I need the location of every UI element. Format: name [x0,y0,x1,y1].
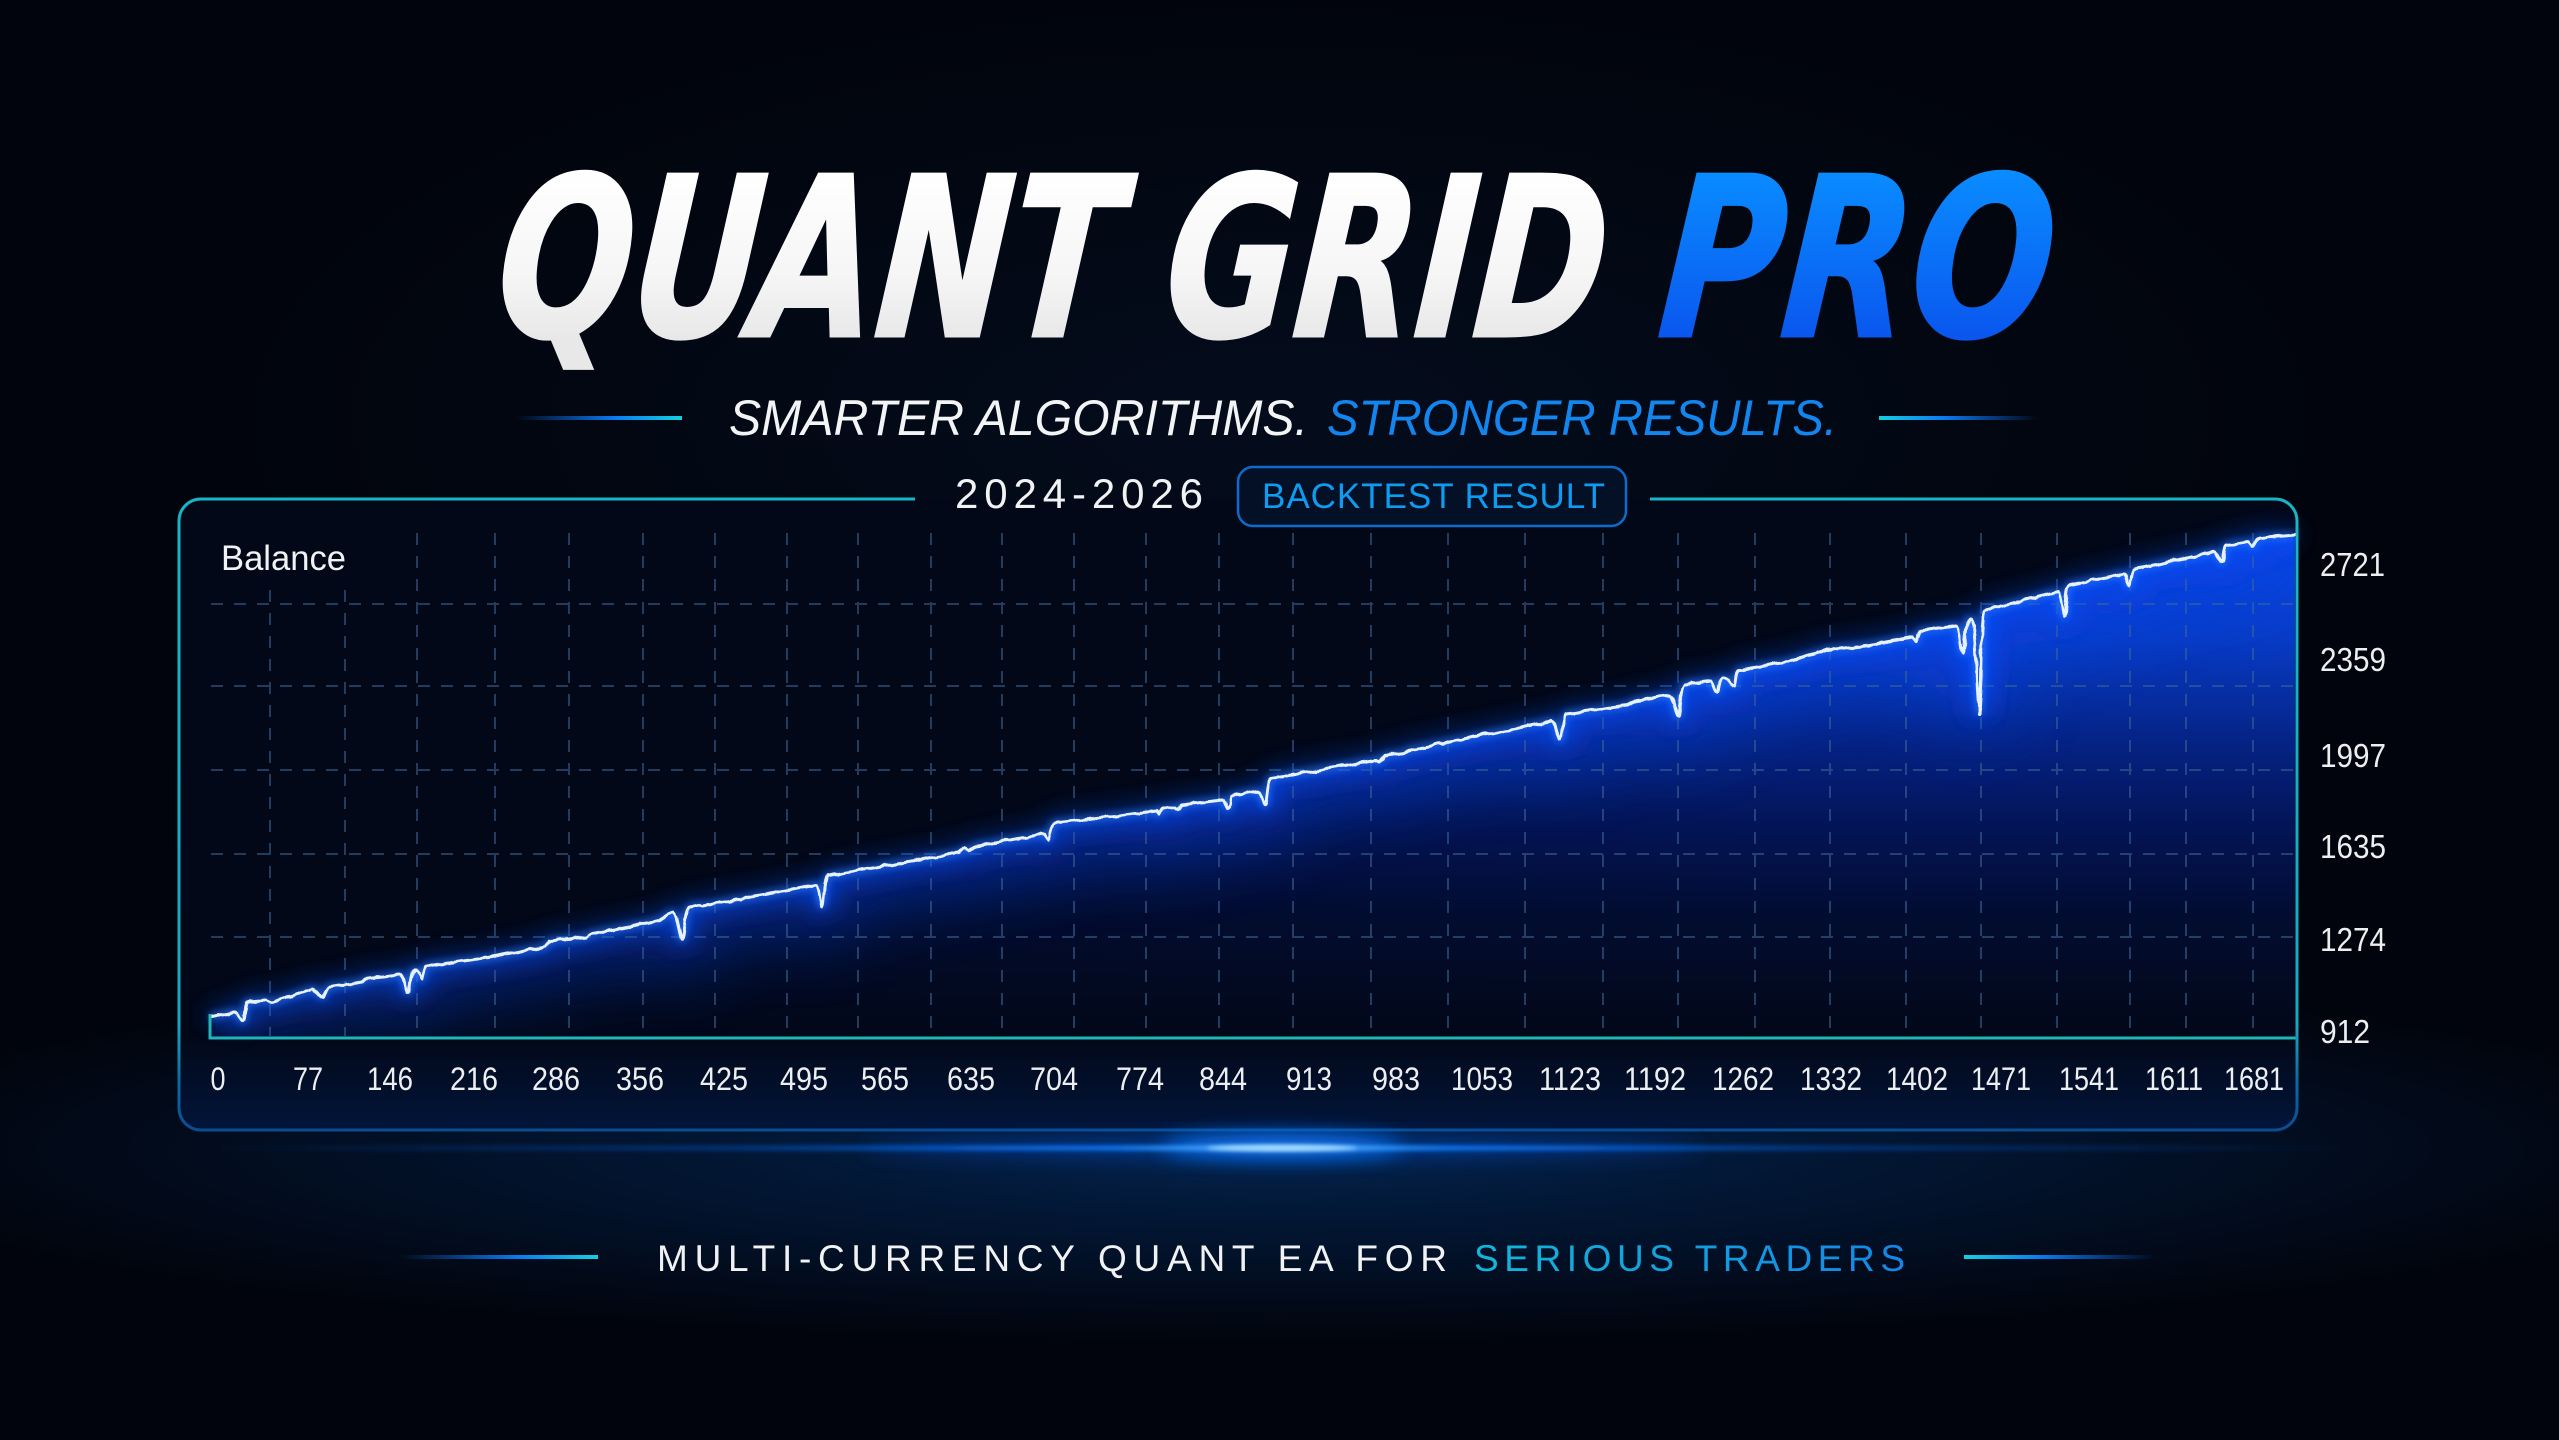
y axis labels [2320,546,2386,1050]
y axis labels: 2721 [2320,546,2385,583]
title word: GRID: GRID [1156,131,1619,389]
subtitle rule right [1879,416,2039,420]
x axis labels: 286 [532,1061,580,1097]
footer rule right [1964,1255,2156,1259]
x axis labels: 495 [780,1061,828,1097]
x axis labels: 216 [450,1061,498,1097]
footer white text: MULTI-CURRENCY QUANT EA FOR [657,1238,1447,1279]
footer blue text: SERIOUS TRADERS [1474,1238,1905,1279]
x axis labels: 913 [1286,1061,1332,1097]
x axis labels: 146 [367,1061,413,1097]
panel: balance chart [179,499,2386,1130]
title word: PRO: PRO [1651,131,2066,389]
footer tagline [400,1238,2156,1279]
x axis labels: 983 [1372,1061,1420,1097]
title [488,131,2066,389]
x axis labels: 844 [1199,1061,1247,1097]
x axis labels: 1053 [1451,1061,1513,1097]
x axis labels: 635 [947,1061,995,1097]
grid lines [211,533,2295,1036]
x axis labels: 1332 [1800,1061,1862,1097]
y axis labels: 912 [2320,1013,2370,1050]
subtitle blue text: STRONGER RESULTS. [1327,390,1837,446]
x axis labels: 1471 [1971,1061,2031,1097]
equity curve glow [210,535,2295,1021]
area fill under curve [210,530,2296,1038]
x axis labels: 774 [1116,1061,1164,1097]
x axis labels: 1262 [1712,1061,1774,1097]
x axis labels: 1611 [2145,1061,2203,1097]
x axis labels: 1123 [1539,1061,1601,1097]
x axis labels: 1402 [1886,1061,1948,1097]
date range: 2024-2026 [955,470,1203,517]
balance label: Balance [221,539,346,578]
x axis labels: 704 [1030,1061,1078,1097]
panel border [179,499,2297,1130]
x axis labels: 1681 [2224,1061,2284,1097]
equity curve line [210,535,2295,1021]
title word: QUANT: QUANT [488,131,1142,389]
light flare under panel [200,1134,2360,1158]
subtitle [516,390,2039,446]
x axis labels: 425 [700,1061,748,1097]
subtitle white text: SMARTER ALGORITHMS. [729,390,1308,446]
footer rule left [400,1255,598,1259]
y axis labels: 2359 [2320,641,2386,678]
x axis labels: 1192 [1624,1061,1686,1097]
y axis labels: 1274 [2320,921,2386,958]
y axis labels: 1997 [2320,737,2386,774]
x axis labels: 1541 [2059,1061,2119,1097]
x axis labels: 0 [210,1061,226,1097]
x axis labels [210,1061,2284,1097]
subtitle rule left [516,416,682,420]
x axis labels: 356 [616,1061,664,1097]
y axis labels: 1635 [2320,828,2386,865]
chart baseline [210,1014,2296,1038]
badge: backtest result: BACKTEST RESULT [1262,477,1605,516]
x axis labels: 565 [861,1061,909,1097]
chart plot [210,530,2296,1038]
badge: backtest result [1238,467,1626,526]
x axis labels: 77 [293,1061,323,1097]
panel background [179,499,2297,1130]
